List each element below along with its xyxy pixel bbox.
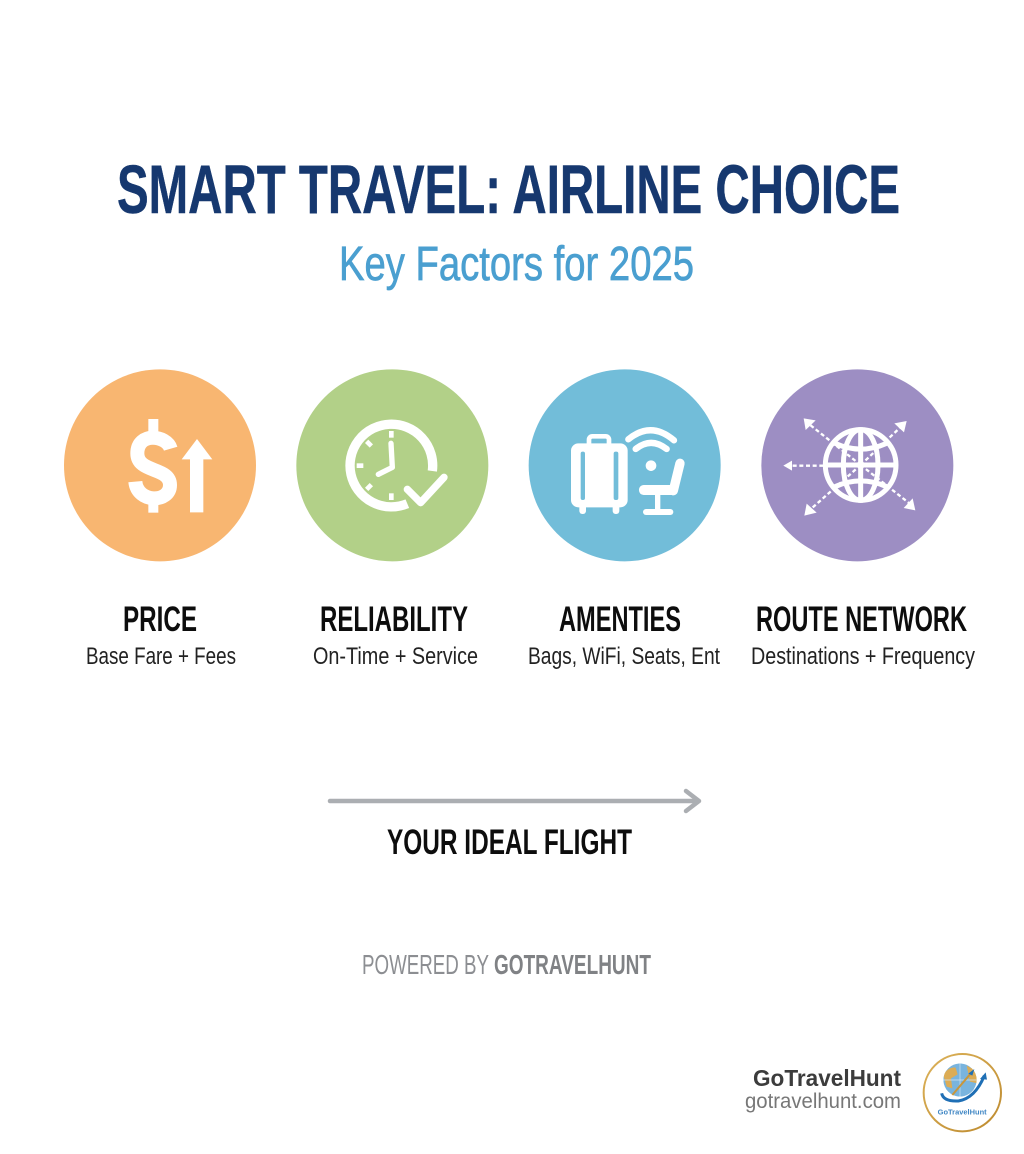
description: amenities: Bags, WiFi, Seats, Ent (528, 643, 720, 670)
icon: dollar sign with up arrow (64, 369, 256, 561)
panel: amenities (528, 369, 721, 670)
icon: gotravelhunt logo (924, 1054, 1001, 1131)
description: route network: Destinations + Frequency (751, 643, 975, 670)
arrow: pointing to ideal flight (330, 791, 699, 811)
icon: suitcase, wifi and seat (529, 369, 721, 561)
label: your ideal flight: YOUR IDEAL FLIGHT (387, 823, 632, 862)
panel: reliability (296, 369, 488, 670)
powered by line (362, 949, 651, 980)
description: reliability: On-Time + Service (313, 643, 478, 670)
powered by line: POWERED BY (362, 949, 489, 980)
icon: globe with radiating arrows (761, 369, 953, 561)
brand url: gotravelhunt.com (745, 1090, 901, 1113)
subtitle: Key Factors for 2025 (339, 238, 694, 291)
brand name: GoTravelHunt (753, 1065, 901, 1091)
description: price: Base Fare + Fees (86, 643, 236, 670)
icon: clock with check mark (296, 369, 488, 561)
icon: gotravelhunt logo: GoTravelHunt (938, 1107, 987, 1116)
powered by line: GOTRAVELHUNT (494, 949, 651, 980)
heading: reliability: RELIABILITY (320, 600, 468, 639)
panel: route network (751, 369, 975, 670)
heading: amenities: AMENTIES (559, 600, 681, 639)
heading: price: PRICE (123, 600, 197, 639)
panel: price (64, 369, 256, 670)
